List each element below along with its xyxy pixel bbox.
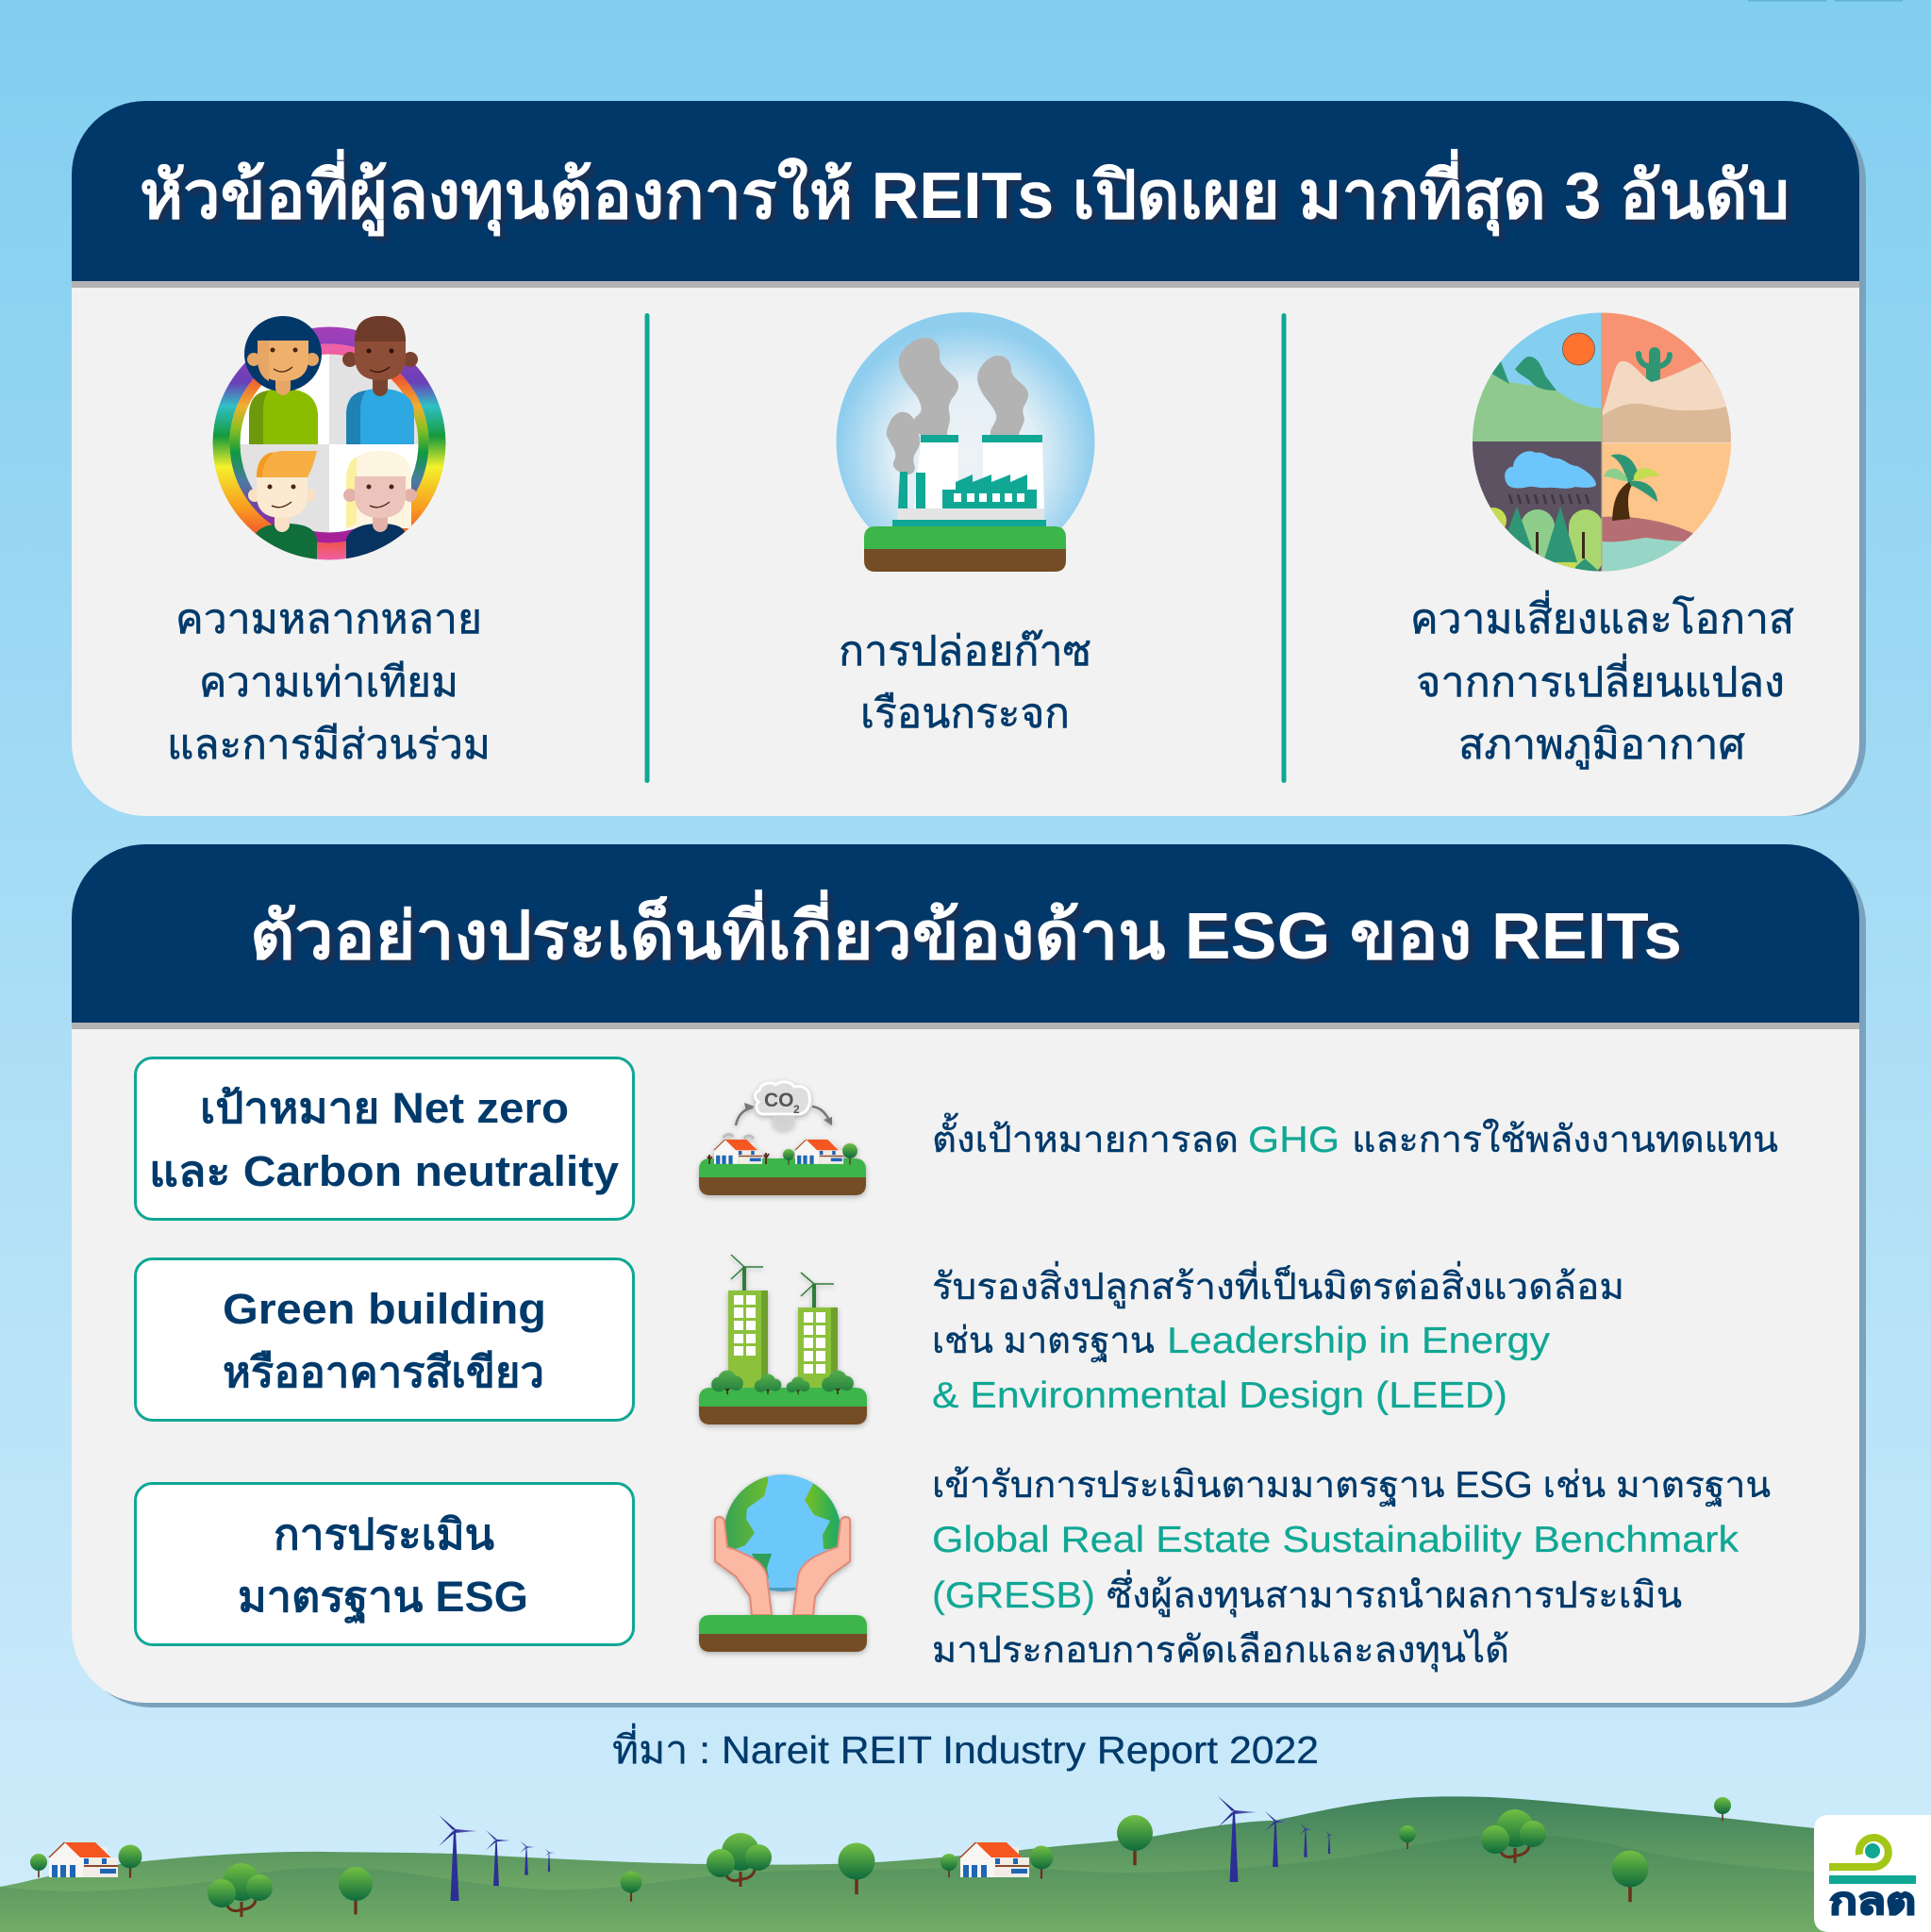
label box: net zero: และ Carbon neutrality <box>149 1147 619 1195</box>
text: diversity, equity and inclusion: และการมีส่วนร่วม <box>167 722 491 768</box>
text: greenhouse gas emissions: เรือนกระจก <box>860 691 1070 737</box>
person: green shirt head <box>244 316 322 395</box>
beach <box>1602 517 1698 542</box>
panel: ESG issue examples <box>72 844 1866 1707</box>
heading: top three topics: หัวข้อที่ผู้ลงทุนต้องการให้ REITs เปิดเผย มากที่สุด 3 อันดับ <box>140 148 1790 237</box>
logo: SEC Thailand: กลต <box>1829 1881 1916 1923</box>
panel: top three disclosure topics <box>72 101 1866 816</box>
icon: diverse people in rainbow ring <box>212 316 446 562</box>
label box: ESG standards: การประเมิน <box>274 1510 494 1558</box>
text: greenhouse gas emissions: การปล่อยก๊าซ <box>839 628 1091 675</box>
forest <box>1490 508 1507 527</box>
factory <box>942 475 1037 508</box>
label box: net zero <box>136 1058 634 1219</box>
sun <box>1562 333 1594 365</box>
person: blue shirt <box>346 389 414 444</box>
text: ESG benchmark assessment <box>932 1465 1771 1673</box>
label box: green building: หรืออาคารสีเขียว <box>223 1348 544 1396</box>
icon: hands holding globe <box>699 1472 867 1652</box>
cactus <box>1639 351 1670 383</box>
source note: ที่มา : Nareit REIT Industry Report 2022 <box>612 1724 1319 1772</box>
icon: CO2 cloud over houses <box>699 1082 866 1195</box>
heading: ESG issues of REITs: ตัวอย่างประเด็นที่เกี่ยวข้องด้าน ESG ของ REITs <box>250 889 1682 973</box>
person: dark green shirt <box>256 524 317 559</box>
label box: ESG standards: มาตรฐาน ESG <box>238 1573 528 1624</box>
cloud and rain <box>1505 451 1596 489</box>
icon: green buildings with turbines <box>699 1255 867 1424</box>
mountains <box>1467 370 1602 441</box>
icon: CO2 cloud over houses: 2 <box>793 1103 800 1116</box>
panel header band <box>72 844 1859 1023</box>
turbines <box>731 1255 834 1307</box>
text: ESG benchmark assessment: ซึ่งผู้ลงทุนสามารถนำผลการประเมิน <box>1107 1570 1682 1618</box>
ground <box>864 526 1066 549</box>
person: orange hair head <box>248 451 317 532</box>
text: diversity, equity and inclusion: ความหลากหลาย <box>175 596 482 642</box>
text: climate risks and opportunities: สภาพภูมิอากาศ <box>1458 722 1745 770</box>
label box: net zero: เป้าหมาย Net zero <box>200 1084 569 1132</box>
text: green building certification: รับรองสิ่งปลูกสร้างที่เป็นมิตรต่อสิ่งแวดล้อม <box>932 1261 1624 1308</box>
smoke <box>887 338 1028 475</box>
icon: four climate quadrants <box>1467 311 1736 575</box>
text: ESG benchmark assessment: (GRESB) <box>932 1575 1095 1616</box>
trees <box>30 1854 47 1877</box>
text: GHG reduction target: ตั้งเป้าหมายการลด <box>932 1112 1239 1160</box>
text: green building certification: Leadership in Energy <box>1167 1321 1551 1361</box>
desert <box>1602 361 1736 443</box>
label box: ESG standards <box>136 1483 634 1645</box>
text: diversity, equity and inclusion: ความเท่าเทียม <box>199 659 458 706</box>
text: green building certification: เช่น มาตรฐาน <box>932 1321 1155 1362</box>
label box: green building: Green building <box>223 1285 546 1333</box>
CO2 label: CO <box>764 1090 794 1111</box>
text: climate risks and opportunities: จากการเปลี่ยนแปลง <box>1416 653 1785 706</box>
text: ESG benchmark assessment: มาประกอบการคัดเลือกและลงทุนได้ <box>932 1629 1509 1673</box>
text: ESG benchmark assessment: Global Real Estate Sustainability Benchmark <box>932 1520 1740 1560</box>
text: climate risks and opportunities <box>1410 590 1794 770</box>
label box: green building <box>136 1258 634 1421</box>
person: blue shirt head <box>342 316 418 396</box>
panel header band <box>72 101 1859 281</box>
person: navy shirt and blond hair <box>343 451 417 562</box>
text: greenhouse gas emissions <box>839 628 1091 737</box>
text: climate risks and opportunities: ความเสี่ยงและโอกาส <box>1410 590 1794 642</box>
person: green shirt <box>249 389 318 444</box>
text: green building certification: & Environmental Design (LEED) <box>932 1375 1507 1416</box>
logo: SEC Thailand <box>1814 1815 1931 1932</box>
houses <box>49 1842 118 1877</box>
towers <box>914 442 958 508</box>
text: GHG reduction target: และการใช้พลังงานทดแทน <box>1352 1119 1778 1160</box>
text: GHG reduction target <box>932 1112 1778 1160</box>
text: green building certification <box>932 1261 1624 1416</box>
palm tree <box>1612 481 1632 521</box>
text: GHG reduction target: GHG <box>1248 1120 1340 1160</box>
landscape: hills, houses, trees and wind turbines <box>0 1796 1931 1932</box>
icon: factory under glass globe <box>836 312 1094 572</box>
wind turbines <box>439 1815 477 1901</box>
text: diversity, equity and inclusion <box>167 596 491 768</box>
text: ESG benchmark assessment: เข้ารับการประเมินตามมาตรฐาน ESG เช่น มาตรฐาน <box>932 1465 1771 1507</box>
